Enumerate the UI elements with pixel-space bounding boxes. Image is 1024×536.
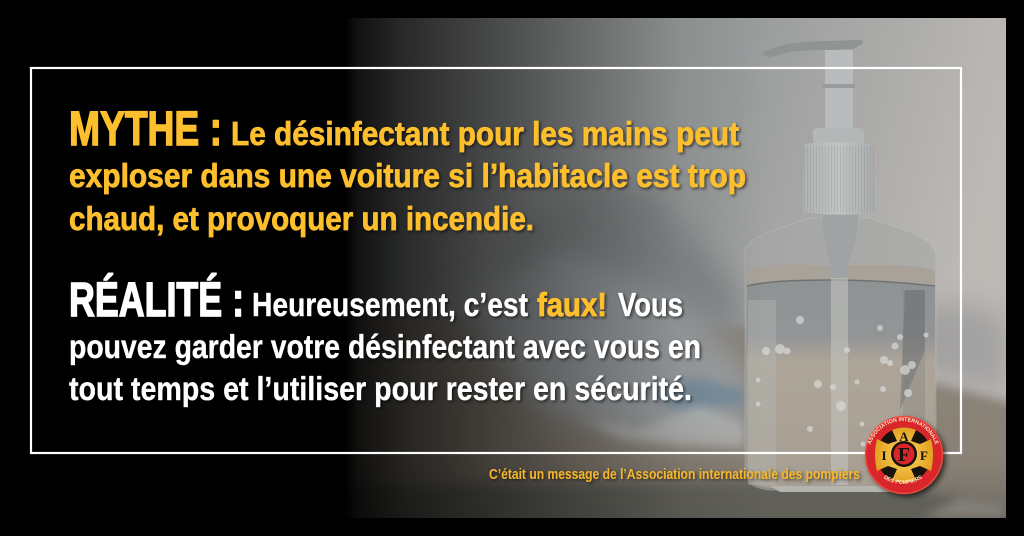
- seal letter F: F: [920, 448, 928, 463]
- seal letter I: I: [881, 448, 887, 463]
- text block: myth: [69, 103, 746, 237]
- pump stem: [825, 50, 853, 130]
- seal ring text bottom: DES POMPIERS: [884, 475, 922, 484]
- white frame: [31, 68, 961, 453]
- myth line 1: Le désinfectant pour les mains peut: [231, 115, 739, 152]
- panel: photo of hand sanitizer and mask: [350, 18, 1006, 518]
- liquid: [747, 270, 935, 488]
- reality line 3: tout temps et l’utiliser pour rester en sécurité.: [69, 370, 692, 407]
- text block: reality: [69, 273, 701, 407]
- seal ring text top: ASSOCIATION INTERNATIONALE: [868, 417, 939, 445]
- logo: IAFF seal: [864, 416, 950, 500]
- black gradient overlay: [345, 18, 715, 518]
- highlighted word: faux!: [537, 286, 607, 323]
- reality heading: RÉALITÉ :: [69, 273, 244, 327]
- seal center letter: F: [898, 444, 910, 466]
- pump neck inside bottle: [822, 215, 858, 278]
- cap: [803, 142, 875, 214]
- footer message: C’était un message de l’Association internationale des pompiers: [489, 467, 860, 483]
- dip tube: [831, 275, 848, 485]
- bubbles: [756, 316, 928, 446]
- pump head spout: [763, 40, 863, 57]
- bottle base: [770, 486, 891, 492]
- myth line 2: exploser dans une voiture si l’habitacle est trop: [69, 157, 746, 194]
- photo: sanitizer bottle: [745, 40, 936, 492]
- photo: table surface: [360, 298, 1006, 518]
- reality line 1 start: Heureusement, c’est: [252, 286, 528, 323]
- myth heading: MYTHE :: [69, 103, 222, 156]
- reality line 1 end: Vous: [618, 286, 683, 323]
- myth line 3: chaud, et provoquer un incendie.: [69, 200, 534, 237]
- reality line 2: pouvez garder votre désinfectant avec vous en: [69, 328, 701, 365]
- photo: blurred face mask: [450, 180, 750, 448]
- collar: [813, 128, 864, 144]
- seal letter A: A: [899, 429, 909, 444]
- bottle body: [745, 218, 936, 490]
- maltese cross: [875, 428, 933, 482]
